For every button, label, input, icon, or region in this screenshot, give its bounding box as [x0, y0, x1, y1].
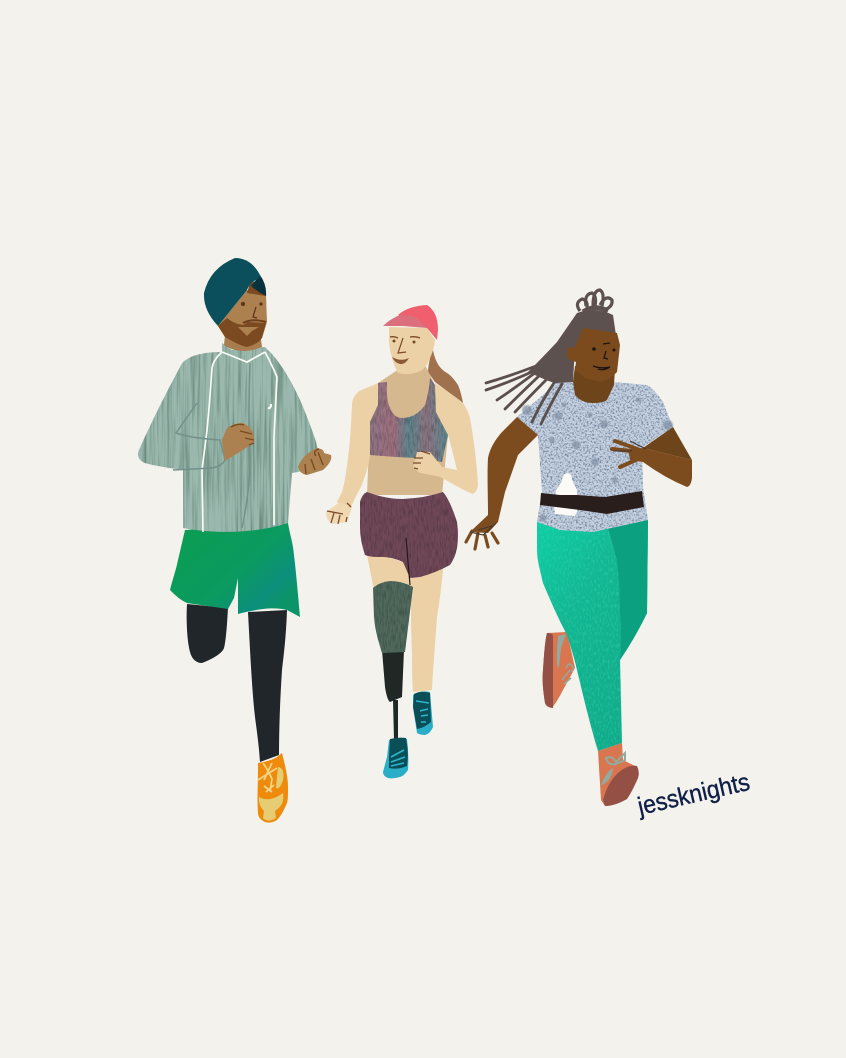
braids over shirt [532, 380, 562, 424]
runner: man in turban [138, 258, 331, 823]
maroon shorts [360, 492, 458, 578]
crop top [370, 378, 448, 462]
hand lines [613, 441, 646, 451]
green shorts [170, 523, 300, 617]
front shoe [598, 743, 639, 806]
hand: right fingers [612, 441, 640, 467]
back shoe [543, 632, 575, 708]
hand lines [327, 503, 351, 524]
head: face and neck [218, 279, 267, 351]
fist: far [298, 448, 331, 475]
torso [367, 365, 448, 495]
prosthetic socket [373, 581, 413, 653]
sleeve and placket lines [173, 363, 250, 528]
hair: top knot [577, 290, 612, 312]
leggings shadow [608, 520, 648, 660]
turban [204, 258, 266, 326]
shorts slit [406, 538, 410, 585]
fist: near [222, 423, 254, 461]
hand: left fingers [466, 531, 498, 549]
shirt: speckled grey [517, 382, 673, 532]
head [567, 328, 620, 382]
arm: right [413, 383, 478, 494]
arm: left [470, 417, 538, 533]
facial features [592, 343, 616, 370]
running belt [540, 491, 644, 514]
shoe: orange [258, 753, 288, 823]
shoe: back teal [413, 691, 433, 735]
cap [383, 305, 438, 340]
shirt trim: white lines [202, 352, 277, 532]
green leggings [537, 520, 648, 751]
hair: mass [528, 310, 617, 384]
hair: braids [486, 366, 548, 412]
hand lines [470, 523, 496, 535]
back leg [187, 604, 228, 663]
arm: right forearm [628, 448, 692, 487]
ponytail [428, 345, 463, 403]
arm: right upper [643, 427, 692, 460]
prosthetic shin [382, 650, 404, 702]
front leg [248, 610, 287, 762]
neck [573, 366, 615, 403]
runner: woman with braids [466, 290, 692, 806]
finger lines [413, 451, 430, 469]
prosthetic pylon [393, 700, 398, 740]
signature: jessknights [634, 768, 752, 821]
left thigh [366, 550, 412, 600]
facial features [390, 337, 420, 364]
shirt: striped grey-green [138, 343, 318, 532]
right leg [409, 555, 445, 692]
arm: left [337, 383, 378, 510]
head [389, 327, 435, 374]
hand: left [326, 502, 352, 524]
shoe: front teal [383, 738, 408, 778]
water bottle [554, 473, 577, 516]
runner: woman with prosthetic leg [326, 305, 478, 778]
